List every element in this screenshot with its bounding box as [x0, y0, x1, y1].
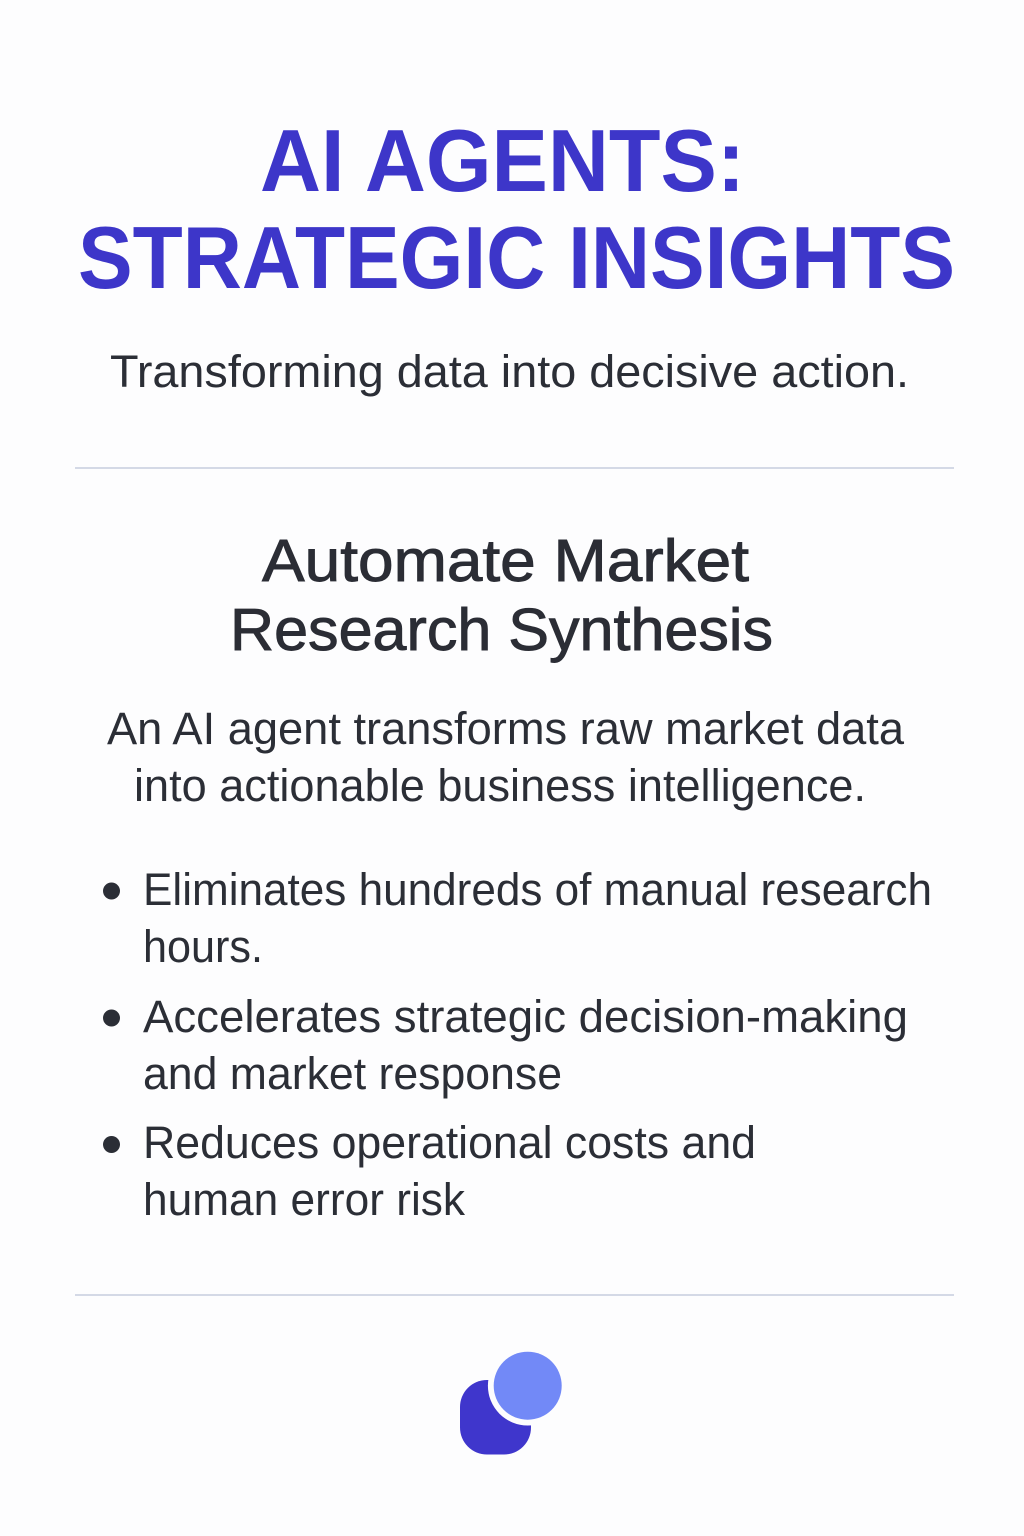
icon: overlapping logo mark: [460, 1346, 568, 1454]
title: AI AGENTS:: [260, 111, 745, 210]
bullet list: [103, 864, 932, 1225]
title: [78, 111, 955, 307]
intro paragraph: into actionable business intelligence.: [134, 760, 866, 811]
bullet: reduces costs: [103, 1117, 756, 1225]
title: STRATEGIC INSIGHTS: [78, 208, 955, 307]
intro paragraph: [107, 703, 905, 811]
bullet: accelerates decisions: and market response: [143, 1048, 562, 1099]
section heading: Automate Market: [262, 528, 749, 594]
bullet: reduces costs: human error risk: [143, 1174, 465, 1225]
bullet: eliminates research hours: Eliminates hundreds of manual research: [143, 864, 932, 915]
bullet: accelerates decisions: Accelerates strategic decision-making: [143, 991, 908, 1042]
bullet: eliminates research hours: [103, 864, 932, 972]
section heading: [230, 528, 773, 663]
section heading: Research Synthesis: [230, 597, 773, 663]
subtitle: Transforming data into decisive action.: [110, 346, 909, 397]
bullet: reduces costs: Reduces operational costs and: [143, 1117, 756, 1168]
intro paragraph: An AI agent transforms raw market data: [107, 703, 905, 754]
bullet: accelerates decisions: [103, 991, 908, 1099]
bullet: eliminates research hours: hours.: [143, 921, 263, 972]
